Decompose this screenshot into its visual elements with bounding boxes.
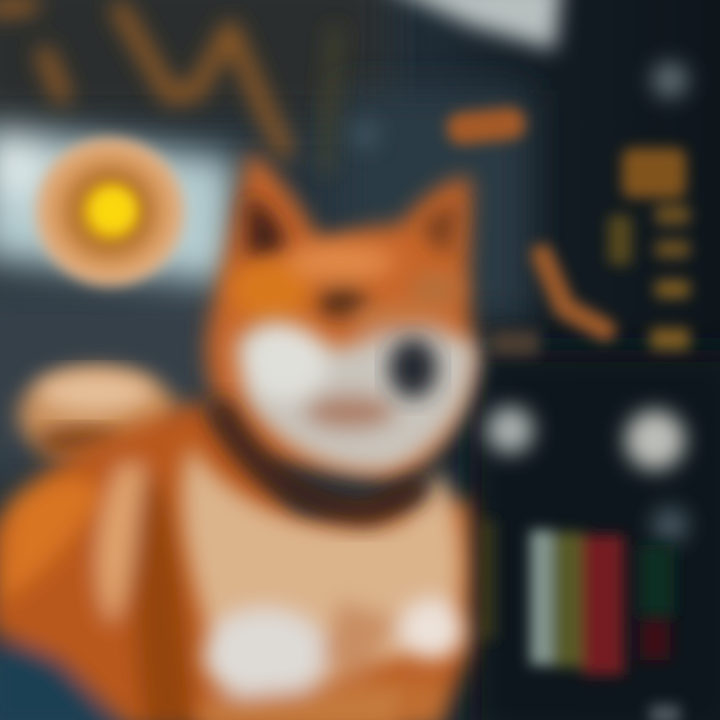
collar — [222, 412, 415, 512]
orange chart line top left — [0, 5, 335, 170]
top screen panel — [375, 0, 562, 50]
white dots — [351, 62, 688, 543]
nose — [389, 338, 437, 398]
tail — [18, 367, 178, 463]
muzzle — [235, 306, 476, 472]
head — [206, 150, 473, 480]
orange chart swoosh — [542, 255, 605, 330]
forehead highlights — [230, 244, 461, 320]
bar chart — [480, 520, 680, 720]
right chart marks — [446, 106, 690, 356]
orange pill — [446, 106, 527, 146]
icon: gold coin — [36, 138, 184, 286]
dog — [0, 150, 476, 720]
ear inner — [246, 195, 460, 262]
body — [0, 400, 470, 720]
orange ticker column — [622, 148, 686, 198]
chest — [182, 445, 464, 720]
bright band behind coin — [0, 125, 235, 285]
